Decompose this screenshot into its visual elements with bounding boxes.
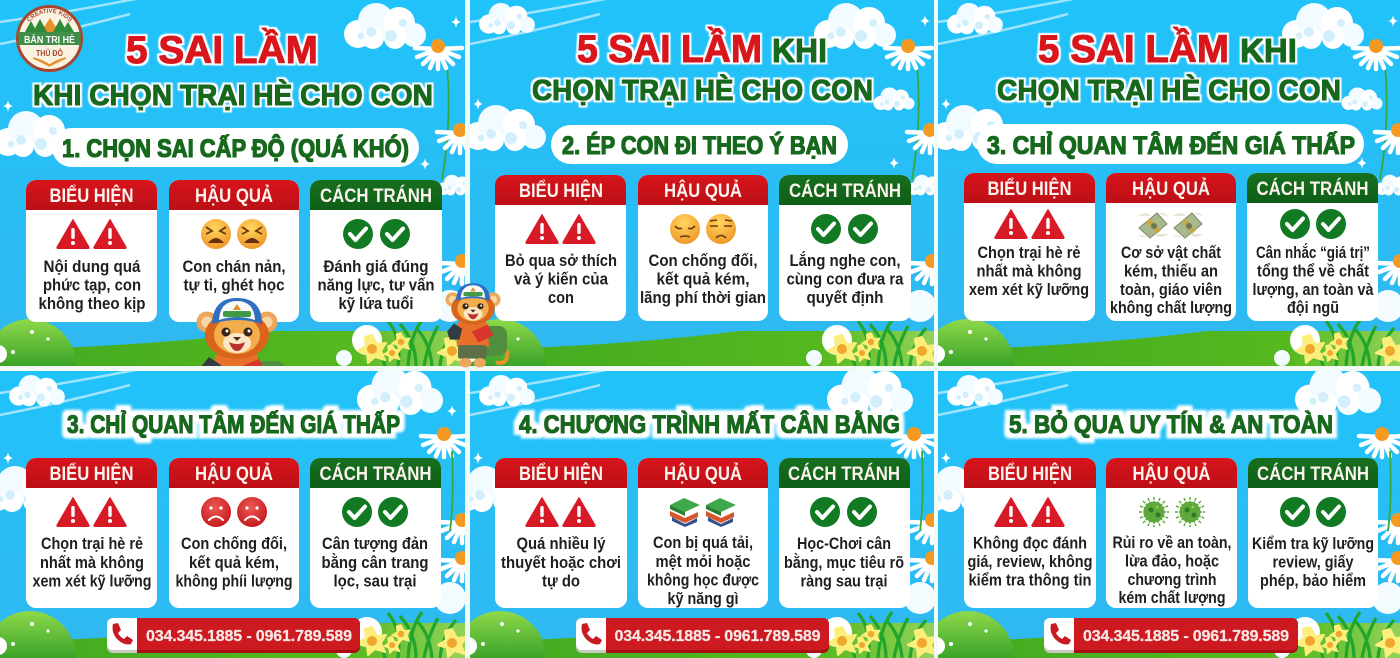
icon: sad red faces [201, 497, 267, 527]
card text: chương trình [1128, 571, 1216, 589]
card header: CÁCH TRÁNH [1256, 178, 1368, 200]
card header [638, 175, 768, 205]
title: panel 3: CHỌN TRẠI HÈ CHO CON [997, 73, 1341, 107]
card: biểu hiện 4 [26, 458, 157, 608]
card header: HẬU QUẢ [195, 463, 273, 485]
icon: warning triangles [526, 498, 595, 527]
icon: warning triangles [995, 498, 1064, 527]
card text: Lắng nghe con, [790, 251, 900, 270]
phone bar 1: 034.345.1885 - 0961.789.589 [146, 628, 352, 645]
card header: CÁCH TRÁNH [1257, 463, 1369, 485]
phone bar 3: 034.345.1885 - 0961.789.589 [1083, 628, 1289, 645]
card text: Chọn trại hè rẻ [41, 535, 143, 553]
card text [1252, 535, 1374, 590]
title: panel 1: KHI CHỌN TRẠI HÈ CHO CON [33, 78, 433, 112]
logo: Bản Trại Hè Thủ Đô: BẢN TRỊ HÈ [24, 33, 75, 46]
card: cách tránh 6 [1248, 458, 1378, 608]
card header: HẬU QUẢ [664, 180, 742, 202]
card text: Không đọc đánh [973, 534, 1087, 552]
card text: Con chán nản, [182, 258, 286, 276]
card text: kém chất lượng [1118, 589, 1226, 607]
icon: phone [1050, 623, 1071, 644]
phone bar 2 [576, 618, 829, 653]
card: cách tránh 2 [779, 175, 911, 321]
logo: Bản Trại Hè Thủ Đô: THỦ ĐÔ [36, 49, 63, 58]
card text: Con bị quá tải, [653, 534, 753, 552]
card text [1112, 534, 1232, 607]
card text [1110, 244, 1232, 317]
card: hậu quả 5 [638, 458, 768, 608]
icon: check marks [810, 497, 877, 527]
panel: top-right background [938, 0, 1400, 366]
card header [310, 180, 442, 210]
card text: Cân tượng đản [322, 535, 428, 553]
icon: warning triangles [57, 498, 126, 527]
icon: check marks [342, 497, 408, 527]
card text: phức tạp, con [43, 276, 141, 294]
card text: ràng sau trại [800, 572, 888, 590]
card header: BIỂU HIỆN [988, 178, 1072, 200]
card text [318, 258, 434, 313]
card text: đội ngũ [1287, 299, 1339, 317]
panel: bottom-right background [938, 371, 1400, 658]
card header [26, 458, 157, 488]
card text [968, 534, 1092, 590]
card text [640, 252, 766, 307]
card text: Quá nhiều lý [516, 535, 606, 553]
card text: xem xét kỹ lưỡng [969, 281, 1089, 299]
title: panel 3: KHI [1240, 32, 1297, 69]
card text: Cân nhắc “giá trị” [1256, 243, 1370, 262]
card text: kết quả kém, [656, 270, 750, 288]
icon: green viruses [1139, 497, 1205, 527]
card text: lãng phí thời gian [640, 289, 766, 307]
card text [969, 244, 1089, 299]
icon: stacks of books [670, 498, 736, 527]
card: cách tránh 4 [310, 458, 441, 608]
card text: quyết định [806, 289, 884, 307]
card header: HẬU QUẢ [1132, 178, 1210, 200]
card header [779, 458, 910, 488]
card text [322, 535, 428, 590]
card text: lừa đảo, hoặc [1125, 552, 1219, 570]
icon: check marks [811, 214, 878, 244]
card text [1252, 243, 1374, 317]
card header: HẬU QUẢ [195, 185, 273, 207]
heading pill: mistake 3: 3. CHỈ QUAN TÂM ĐẾN GIÁ THẤP [987, 130, 1355, 160]
card text: toàn, giáo viên [1120, 281, 1222, 299]
heading pill: mistake 2: 2. ÉP CON ĐI THEO Ý BẠN [562, 130, 837, 160]
panel: top-left background [0, 0, 465, 366]
card text: và ý kiến của [514, 270, 609, 288]
panel: bottom-middle background [470, 371, 934, 658]
card text: nhất mà không [40, 554, 144, 572]
card text: không chất lượng [1110, 299, 1232, 317]
panel: bottom-left background [0, 371, 465, 658]
card text: giá, review, không [968, 553, 1092, 571]
card header: CÁCH TRÁNH [789, 180, 901, 202]
card: biểu hiện 3 [964, 173, 1095, 321]
title: panel 2 [532, 27, 873, 107]
mascot: lion in panel 1 [196, 298, 284, 366]
heading pill: mistake 2 [551, 125, 848, 164]
card text: năng lực, tư vấn [318, 276, 434, 294]
card text: kỹ lứa tuổi [338, 295, 414, 313]
card text [38, 258, 146, 313]
card header: BIỂU HIỆN [519, 180, 603, 202]
card header [310, 458, 441, 488]
card text [501, 535, 621, 590]
heading pill: mistake 1 [52, 128, 419, 167]
heading: mistake 5: 5. BỎ QUA UY TÍN & AN TOÀN [1009, 409, 1333, 439]
card text: Đánh giá đúng [324, 258, 428, 276]
logo: Bản Trại Hè Thủ Đô [16, 5, 83, 72]
card header: BIỂU HIỆN [519, 463, 603, 485]
card header [169, 180, 299, 210]
card text [182, 258, 286, 294]
card text: cùng con đưa ra [786, 270, 904, 288]
heading: mistake 4: 4. CHƯƠNG TRÌNH MẤT CÂN BẰNG [519, 409, 900, 439]
icon: warning triangles [995, 210, 1064, 239]
icon: money with wings [1138, 213, 1203, 238]
card: cách tránh 1 [310, 180, 442, 322]
card: biểu hiện 2 [495, 175, 626, 321]
title: panel 1 [33, 28, 433, 112]
title: panel 2: KHI [772, 32, 827, 69]
card header: BIỂU HIỆN [50, 185, 134, 207]
icon: warning triangles [57, 220, 126, 249]
card text [32, 535, 152, 590]
card header: CÁCH TRÁNH [320, 185, 432, 207]
card text: phép, bảo hiểm [1260, 572, 1366, 590]
icon: pensive and unamused faces [670, 214, 736, 244]
title: panel 3: 5 SAI LẦM [1038, 27, 1229, 71]
card header: BIỂU HIỆN [988, 463, 1072, 485]
icon: check marks [343, 219, 410, 249]
icon: phone [112, 623, 133, 644]
card text [786, 251, 904, 307]
card: hậu quả 1 [169, 180, 299, 322]
card header [964, 173, 1095, 203]
mascot: lion crossing panels 1 and 2 [446, 283, 510, 368]
card text: kiểm tra thông tin [968, 572, 1092, 590]
card header: CÁCH TRÁNH [788, 463, 900, 485]
card header [1106, 458, 1237, 488]
card text: Con chống đối, [181, 535, 287, 553]
icon: check marks [1280, 209, 1346, 239]
card: biểu hiện 1 [26, 180, 157, 322]
phone bar 1 [107, 618, 360, 653]
card text: kém, thiếu an [1124, 262, 1218, 280]
card header [1106, 173, 1236, 203]
card text: tổng thể về chất [1257, 262, 1369, 280]
card: cách tránh 5 [779, 458, 910, 608]
card header [1247, 173, 1378, 203]
heading pill: mistake 3 [977, 124, 1364, 164]
card text: kết quả kém, [189, 554, 279, 572]
card header [26, 180, 157, 210]
phone bar 2: 034.345.1885 - 0961.789.589 [614, 628, 821, 645]
card text: tự ti, ghét học [184, 276, 284, 294]
icon: tired faces [201, 219, 267, 249]
card text: lọc, sau trại [334, 572, 416, 590]
icon: warning triangles [526, 214, 595, 244]
card: hậu quả 2 [638, 175, 768, 321]
card text: Kiểm tra kỹ lưỡng [1252, 535, 1374, 553]
card text: kỹ năng gì [668, 590, 738, 608]
card text: Bỏ qua sở thích [505, 252, 617, 270]
card text: không học được [647, 572, 759, 590]
title: panel 3 [997, 27, 1341, 107]
title: panel 2: 5 SAI LẦM [577, 27, 762, 71]
card text: Cơ sở vật chất [1121, 244, 1221, 262]
card text: Rủi ro về an toàn, [1112, 534, 1232, 552]
card text: mệt mỏi hoặc [656, 553, 750, 571]
card text: không theo kịp [38, 295, 146, 313]
card header [638, 458, 768, 488]
title: panel 1: 5 SAI LẦM [126, 28, 318, 72]
card: hậu quả 6 [1106, 458, 1237, 608]
card: hậu quả 3 [1106, 173, 1236, 321]
card: cách tránh 3 [1247, 173, 1378, 321]
card header: BIỂU HIỆN [50, 463, 134, 485]
card text: thuyết hoặc chơi [501, 554, 621, 572]
icon: check marks [1280, 497, 1346, 527]
card: biểu hiện 5 [495, 458, 627, 608]
card text: không phíi lượng [176, 572, 292, 590]
card text: Con chống đối, [648, 252, 758, 270]
card text [505, 252, 617, 307]
heading: mistake 3 repeated: 3. CHỈ QUAN TÂM ĐẾN GIÁ THẤP [67, 409, 400, 439]
card header: HẬU QUẢ [664, 463, 742, 485]
card header: CÁCH TRÁNH [320, 463, 432, 485]
logo: Bản Trại Hè Thủ Đô: CREATIVE KIDS [27, 8, 72, 22]
phone bar 3 [1044, 618, 1298, 653]
card text: bằng, mục tiêu rõ [784, 553, 904, 572]
card header [1248, 458, 1378, 488]
card text: tự do [542, 572, 580, 590]
card text [647, 534, 759, 608]
card: biểu hiện 6 [964, 458, 1096, 608]
card text: review, giấy [1272, 554, 1354, 572]
heading pill: mistake 1: 1. CHỌN SAI CẤP ĐỘ (QUÁ KHÓ) [62, 133, 409, 163]
card text [784, 535, 904, 590]
title: panel 2: CHỌN TRẠI HÈ CHO CON [532, 73, 873, 107]
card text [176, 535, 292, 590]
card header [964, 458, 1096, 488]
card header [495, 175, 626, 205]
card text: Nội dung quá [44, 258, 141, 276]
card header [169, 458, 299, 488]
card header [779, 175, 911, 205]
panel: top-middle background [470, 0, 934, 366]
card text: con [548, 289, 574, 307]
card header: HẬU QUẢ [1132, 463, 1211, 485]
card text: xem xét kỹ lưỡng [32, 572, 152, 590]
card text: Chọn trại hè rẻ [978, 244, 1080, 262]
card text: Học-Chơi cân [797, 535, 891, 553]
card text: lượng, an toàn và [1252, 281, 1374, 299]
card text: nhất mà không [976, 262, 1082, 280]
card text: bằng cân trang [322, 553, 428, 572]
icon: phone [582, 623, 602, 644]
card header [495, 458, 627, 488]
card: hậu quả 4 [169, 458, 299, 608]
